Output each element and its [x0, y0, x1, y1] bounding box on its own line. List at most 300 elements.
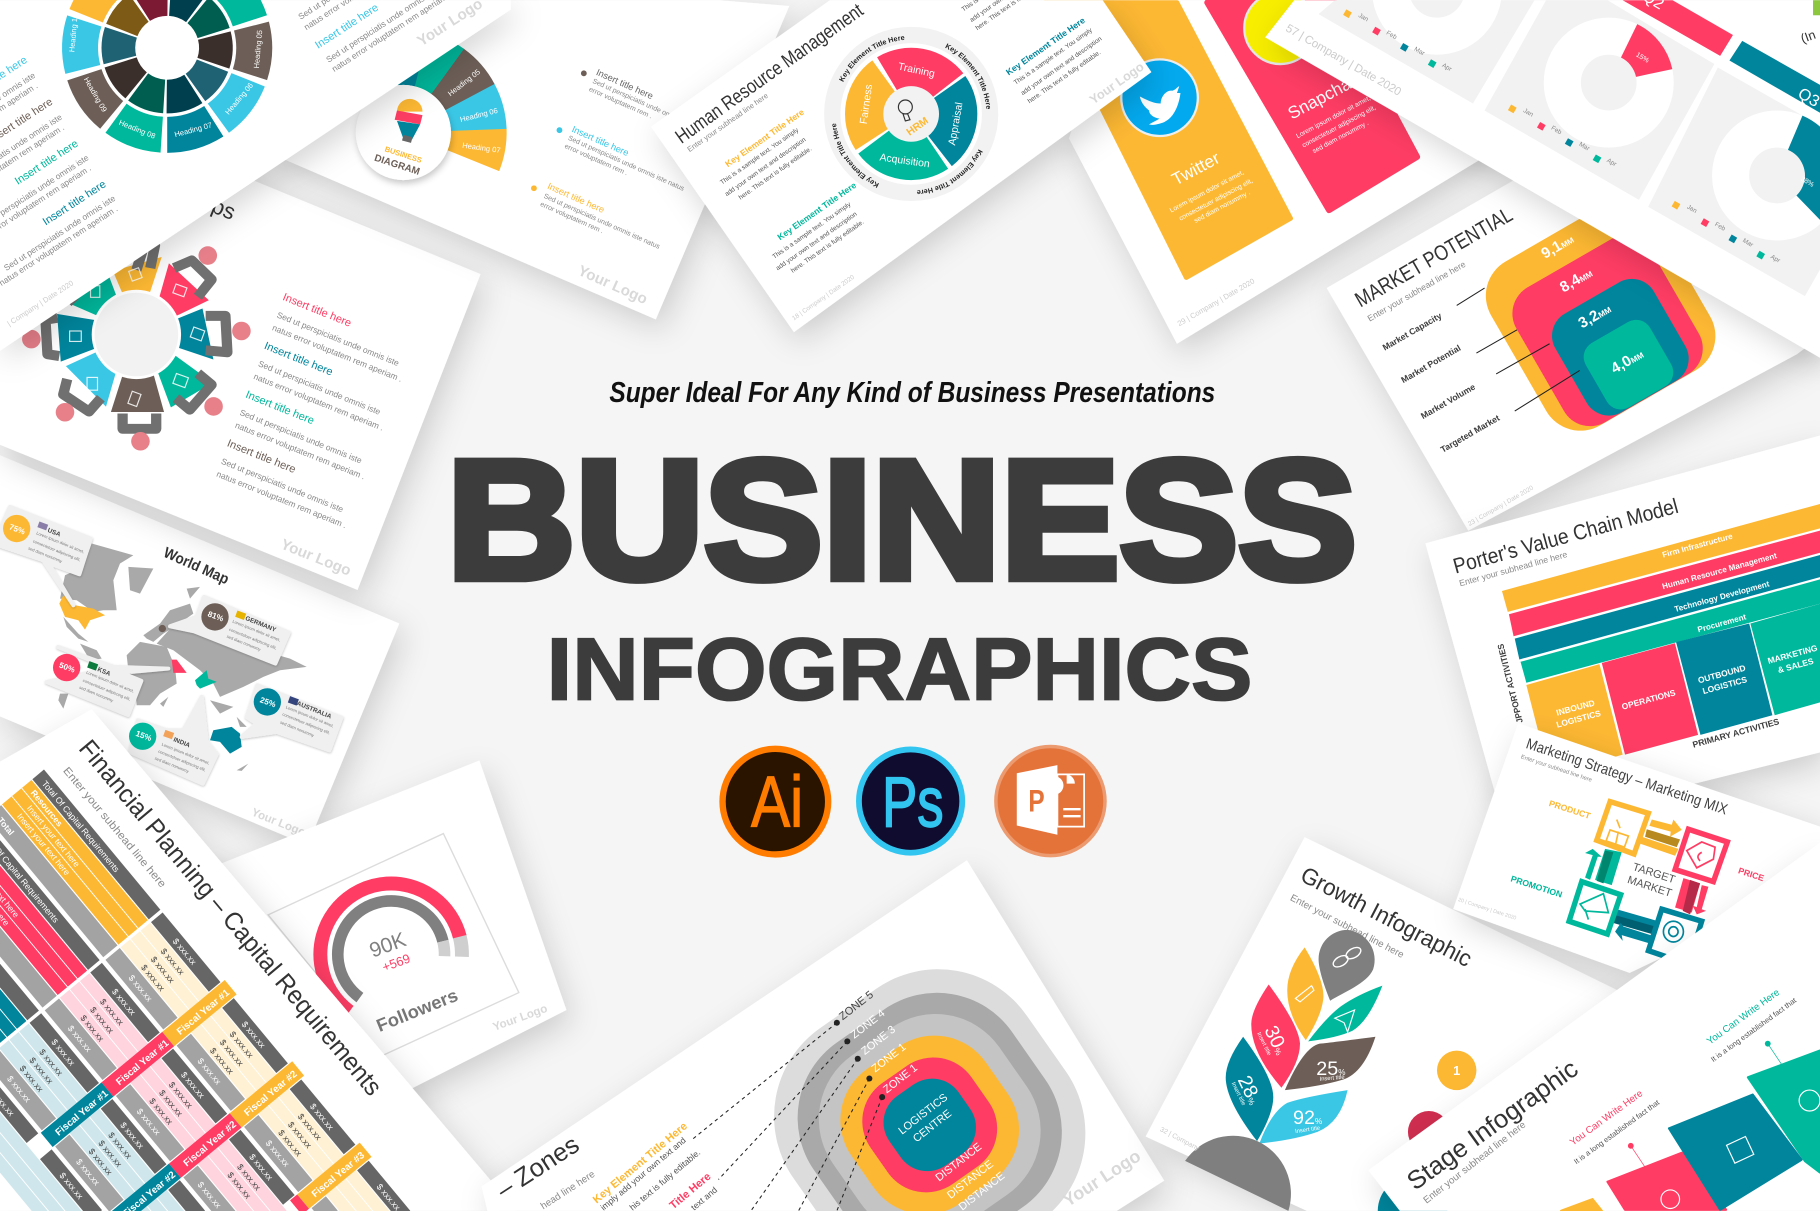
title: Porter's Value Chain Model — [1451, 494, 1681, 578]
support activity bands — [1502, 504, 1820, 683]
table: $ xxx.xx — [235, 1162, 263, 1193]
gauge value: 90K — [366, 928, 409, 962]
callout labels: GERMANY — [244, 615, 278, 634]
text list: natus error voluptatem rem aperiam . — [271, 322, 404, 384]
fiscal year labels: Fiscal Year #1 — [175, 987, 232, 1038]
cell values: $ xxx.xx — [247, 1152, 275, 1183]
panel: groups wheel slide — [0, 105, 481, 590]
donut slice 38% — [1716, 115, 1820, 236]
fan labels — [446, 67, 501, 155]
callout labels: consectetuer adipiscing elit, — [82, 678, 131, 702]
text list: Insert title here — [595, 67, 655, 101]
footer: | Company | Date 2020 — [5, 278, 75, 328]
panel: financial planning slide — [0, 709, 517, 1211]
callout labels: consectetuer adipiscing elit, — [157, 749, 207, 772]
callout labels: sed diam nonummy — [279, 720, 316, 738]
map highlight: Australia — [210, 727, 242, 754]
icon: Adobe Photoshop: Ps — [882, 764, 944, 843]
wheel labels: Appraisal — [947, 102, 965, 146]
cell values: $ xxx.xx — [127, 973, 155, 1004]
block labels: & SALES — [1777, 656, 1815, 675]
cell values: $ xxx.xx — [264, 1138, 292, 1169]
twitter card — [1045, 3, 1291, 278]
block labels — [1552, 643, 1820, 730]
legends — [1343, 9, 1782, 265]
HRM wheel — [824, 27, 998, 201]
icon: Adobe Photoshop — [859, 749, 962, 853]
callout labels: Lorem ipsum dolor sit amet, — [232, 619, 281, 642]
title: Stage Infographic — [1402, 1055, 1584, 1196]
logo text: Your Logo — [278, 536, 353, 580]
chart labels: Market Volume — [1419, 382, 1477, 421]
curved labels: Key Element Title Here Key Element Title HereKey Element Title Here — [832, 43, 990, 194]
leaf values: 30% — [1260, 1022, 1292, 1058]
centre label: MARKET — [1626, 874, 1673, 900]
title: Zones: – Zones — [492, 1131, 584, 1204]
leaf values: Insert title — [1319, 1075, 1345, 1083]
axis label: support: JPPORT ACTIVITIES — [1495, 643, 1525, 724]
text list: Sed ut perspiciatis unde omnis iste natus — [591, 78, 710, 136]
box icons — [1580, 820, 1715, 942]
text list — [215, 291, 404, 530]
band labels: Procurement — [1697, 612, 1747, 634]
row labels: Resources — [29, 788, 65, 829]
map highlight: India — [195, 670, 217, 689]
table: $ xxx.xx — [228, 1029, 256, 1060]
text list: Insert title here — [41, 178, 108, 228]
gray rows — [0, 805, 338, 1211]
chart labels: Targeted Market — [1439, 413, 1501, 455]
wheel labels — [67, 13, 264, 141]
mix diagram — [1569, 802, 1727, 964]
hub icon — [898, 100, 912, 121]
legends: Mar — [1578, 141, 1591, 153]
legends: Jan — [1686, 204, 1698, 215]
text list: natus error voluptatem rem aperiam . — [252, 371, 385, 433]
callout labels: consectetuer adipiscing elit, — [228, 627, 278, 651]
subtitle: head line here — [539, 1169, 598, 1211]
fiscal year labels: Fiscal Year #2 — [242, 1068, 300, 1119]
panel: social media slide — [1045, 0, 1532, 344]
key element text: add your own text and description — [1020, 35, 1104, 97]
callout labels: USA — [46, 527, 62, 539]
stage callout: pink: It is a long established fact that — [1572, 1097, 1662, 1166]
table: $ xxx.xx — [18, 1063, 46, 1094]
label: price: PRICE — [1737, 865, 1766, 883]
quarter label — [1798, 0, 1820, 46]
legends: Feb — [1713, 221, 1727, 233]
row labels: Insert your text here — [25, 803, 82, 869]
key element text: This is a sample text. You simply — [1013, 27, 1094, 87]
zone marker dots — [834, 1020, 885, 1100]
table: $ xxx.xx — [296, 1111, 324, 1143]
fan labels: Heading 07 — [462, 141, 501, 155]
title fragment: ps — [208, 193, 239, 225]
legends: Jan — [1522, 107, 1535, 119]
snapchat body — [1295, 95, 1377, 155]
cell values: $ xxx.xx — [196, 1180, 224, 1211]
text list: natus error voluptatem rem aperiam . — [0, 204, 119, 288]
cell values: $ xxx.xx — [58, 1171, 86, 1202]
chart values: 3,2MM — [1576, 300, 1614, 332]
row labels — [0, 779, 122, 976]
panel: world map slide — [0, 455, 399, 845]
icon: twitter — [1121, 59, 1198, 136]
snapchat body: sed diam nonummy . — [1312, 120, 1370, 155]
wheel labels: Heading 05 — [252, 30, 264, 69]
zone labels: ZONE 1 — [881, 1062, 920, 1096]
cell values: $ xxx.xx — [66, 1023, 94, 1054]
hub label: BUSINESS — [384, 144, 423, 165]
callout labels: 15% — [134, 729, 153, 743]
box: promotion — [1569, 882, 1621, 934]
callout labels: consectetuer adipiscing elit, — [32, 539, 81, 562]
donut card 2 — [1485, 0, 1714, 200]
callout cards — [0, 507, 341, 784]
block labels: LOGISTICS — [1701, 674, 1748, 696]
cell values — [0, 936, 403, 1211]
footer: 18 | Company | Date 2020 — [791, 274, 856, 322]
callout labels: sed diam nonummy — [226, 634, 262, 652]
callout labels: Lorem ipsum dolor sit amet, — [285, 705, 335, 728]
chart labels: Market Capacity — [1381, 310, 1444, 352]
hub label: DIAGRAM — [373, 153, 421, 178]
wheel labels: Heading 10 — [67, 13, 80, 53]
wheel labels — [859, 62, 965, 170]
icon: PowerPoint: P — [1028, 784, 1045, 819]
donut card 1 — [1319, 0, 1534, 103]
gauge delta: +569 — [380, 951, 412, 975]
box: product — [1597, 802, 1648, 854]
panel: porter value chain slide — [1425, 435, 1820, 801]
centre label: TARGET — [1631, 861, 1676, 886]
text list: Insert title here — [262, 340, 334, 378]
leaf values: Insert title — [1255, 1031, 1272, 1057]
table: $ xxx.xx — [159, 946, 187, 977]
key element text: Key Element Title Here — [723, 107, 806, 169]
legends: Feb — [1550, 125, 1563, 136]
label: promotion: PROMOTION — [1509, 874, 1564, 900]
icon: snapchat — [1244, 0, 1316, 64]
key element text: here. This text is fully editable. — [790, 219, 866, 275]
twitter body: consectetuer adipiscing elit, — [1178, 177, 1254, 222]
twitter body: Lorem ipsum dolor sit amet, — [1169, 169, 1245, 214]
icon: rocket — [1295, 986, 1314, 1002]
block labels: LOGISTICS — [1555, 708, 1602, 730]
stage callout: green: You Can Write Here — [1705, 987, 1782, 1047]
wheel segments — [55, 255, 216, 413]
icon: chain — [1331, 945, 1363, 969]
chart values: 9,1MM — [1538, 230, 1577, 262]
snapchat body: Lorem ipsum dolor sit amet, — [1295, 95, 1372, 140]
legends: Jan — [1357, 12, 1370, 24]
table: $ xxx.xx — [98, 997, 126, 1028]
table: $ xxx.xx — [208, 1046, 236, 1077]
block labels: OUTBOUND — [1697, 663, 1747, 685]
callout labels — [8, 522, 335, 774]
outer dots — [22, 246, 251, 451]
cell values: $ xxx.xx — [179, 1070, 207, 1101]
callout labels: Lorem ipsum dolor sit amet, — [86, 670, 135, 694]
footer: 29 | Company | Date 2020 — [1176, 276, 1256, 328]
table: $ xxx.xx — [157, 1088, 185, 1119]
panel: heading wheel slide — [0, 0, 511, 351]
fiscal year headers — [41, 980, 372, 1211]
slice label: 38% — [1799, 176, 1815, 189]
table: $ xxx.xx — [139, 963, 167, 994]
panel: marketing mix slide — [1453, 723, 1820, 973]
callout labels: sed diam nonummy — [154, 756, 190, 774]
icon: PowerPoint — [996, 747, 1105, 856]
table: $ xxx.xx — [78, 1013, 106, 1044]
twitter label: Twitter — [1168, 148, 1223, 189]
text list — [0, 54, 119, 288]
centre label: LOGISTICS — [896, 1092, 950, 1137]
table: $ xxx.xx — [149, 954, 177, 985]
table: $ xxx.xx — [27, 1055, 56, 1086]
subtitle: Enter your subhead line here — [60, 765, 168, 890]
distance labels: DISTANCE — [945, 1158, 996, 1202]
panel: market potential slide — [1327, 116, 1820, 531]
centre label: CENTRE — [911, 1108, 954, 1145]
band labels — [1661, 532, 1778, 634]
inner frame — [268, 834, 519, 1055]
row labels: Insert your text here — [15, 811, 72, 877]
fiscal year labels: Fiscal Year #3 — [310, 1150, 367, 1200]
subtitle: Enter your subhead line here — [685, 91, 770, 154]
callout labels: consectetuer adipiscing elit, — [282, 711, 331, 735]
leaf chart — [1185, 930, 1382, 1211]
block labels: MARKETING — [1766, 643, 1819, 666]
wheel icons — [70, 268, 205, 406]
cell values: $ xxx.xx — [171, 936, 199, 967]
nested squares chart — [1471, 187, 1730, 445]
logo text: Your Logo — [491, 1002, 549, 1034]
text list: Insert title here — [546, 181, 606, 215]
row separators — [0, 788, 376, 1211]
key element text: imply add your own text and — [598, 1135, 688, 1211]
text list: right: Insert title here — [313, 2, 381, 51]
text list: Sed ut perspiciatis unde omnis iste — [276, 310, 401, 368]
wheel labels: Heading 09 — [82, 76, 109, 113]
callout labels: 25% — [259, 695, 277, 709]
table: $ xxx.xx — [218, 1037, 246, 1068]
step marker 1 — [1437, 1051, 1476, 1090]
wheel inner ring — [99, 0, 236, 116]
zone leader lines — [693, 1023, 882, 1211]
chart values — [1538, 230, 1647, 377]
table: $ xxx.xx — [286, 1120, 314, 1151]
callout labels: Lorem ipsum dolor sit amet, — [161, 742, 210, 766]
wheel chairs — [45, 245, 227, 429]
legends: Feb — [1385, 30, 1398, 41]
table: $ xxx.xx — [147, 1096, 175, 1127]
zone rings — [732, 927, 1128, 1211]
step marker 3 — [1378, 1176, 1447, 1211]
quarter bar Q2 — [1623, 0, 1733, 56]
donut slice 15% — [1547, 21, 1671, 145]
block labels: INBOUND — [1555, 698, 1596, 718]
step marker 1: 1 — [1453, 1063, 1460, 1078]
wheel hub — [95, 293, 178, 376]
panel: donut charts slide — [1265, 0, 1820, 358]
icon: Adobe Illustrator — [723, 749, 828, 854]
donut card 3 — [1648, 68, 1820, 296]
band labels: Human Resource Management — [1661, 551, 1778, 591]
cell values: $ xxx.xx — [118, 1120, 146, 1151]
primary activity blocks — [1526, 604, 1820, 776]
band labels: Firm Infrastructure — [1661, 532, 1734, 560]
callout labels: 75% — [8, 522, 26, 536]
chart values: 4,0MM — [1608, 345, 1647, 377]
snapchat label: Snapchat — [1284, 71, 1359, 123]
snapchat card — [1207, 0, 1417, 210]
callout labels: INDIA — [172, 736, 191, 749]
subtitle: Enter your subhead line here — [1520, 754, 1592, 784]
text list: Insert title here — [13, 138, 81, 187]
snapchat body: consectetuer adipiscing elit, — [1301, 104, 1377, 149]
fiscal year labels: Fiscal Year #1 — [114, 1038, 172, 1088]
diagram hub — [356, 85, 451, 180]
text list: error voluptatem rem . — [563, 143, 629, 177]
zone labels: ZONE 3 — [859, 1024, 898, 1058]
logo text: Your Logo — [1087, 59, 1147, 107]
wheel labels: Heading 07 — [173, 120, 213, 139]
fiscal year labels: Fiscal Year #1 — [54, 1088, 111, 1138]
table: $ xxx.xx — [87, 1146, 115, 1177]
cell values: $ xxx.xx — [195, 1056, 224, 1087]
key element text: add your own text and description — [724, 136, 808, 198]
chart values: 8,4MM — [1557, 264, 1596, 296]
text list: Sed ut perspiciatis unde omnis iste — [2, 193, 117, 273]
callout labels: AUSTRALIA — [296, 700, 333, 721]
fan labels: Heading 05 — [446, 67, 482, 98]
chart labels — [1381, 310, 1501, 455]
distance labels — [933, 1141, 1007, 1211]
text list: Sed ut perspiciatis unde omnis iste — [238, 407, 364, 466]
table: $ xxx.xx — [106, 1130, 134, 1161]
wheel hub — [883, 86, 939, 142]
text list: Insert title here — [244, 389, 316, 427]
leaf values: Insert title — [1295, 1126, 1321, 1135]
text list — [531, 67, 710, 251]
key element text: Key Element Title Here — [591, 1120, 690, 1206]
label: Followers: Followers — [374, 985, 461, 1036]
panel: followers slide — [174, 760, 566, 1097]
legends: Mar — [1413, 46, 1427, 58]
callout labels: sed diam nonummy — [79, 685, 115, 703]
distance labels: DISTANCE — [933, 1141, 984, 1184]
logo text: Your Logo — [575, 262, 650, 308]
cell values: $ xxx.xx — [135, 1106, 163, 1137]
icon: Adobe Illustrator: Ai — [751, 763, 803, 843]
table: $ xxx.xx — [167, 1080, 195, 1111]
callout labels: Lorem ipsum dolor sit amet, — [36, 530, 85, 554]
legends: Apr — [1441, 62, 1453, 73]
block labels: OPERATIONS — [1621, 687, 1677, 712]
text list: Sed ut perspiciatis unde omnis iste — [220, 456, 345, 514]
text list: Sed ut perspiciatis unde omnis iste natus — [567, 135, 686, 193]
zone labels: ZONE 4 — [849, 1007, 887, 1041]
step marker 2 — [1408, 1111, 1450, 1153]
world map — [0, 507, 341, 784]
panel: growth infographic slide — [1146, 837, 1648, 1211]
percent badges — [3, 515, 281, 750]
stage icons — [1661, 1090, 1820, 1208]
footer: 57 | Company | Date 2020 — [1283, 22, 1403, 99]
leaf values: Insert title — [1230, 1081, 1246, 1107]
key element text: Key Element Title Here — [775, 180, 858, 242]
subtitle: Enter your subhead line here — [1422, 1119, 1529, 1206]
stage callout: green: It is a long established fact that — [1709, 995, 1799, 1064]
logo text: Your Logo — [250, 806, 307, 839]
zone labels: ZONE 1 — [870, 1041, 908, 1075]
text list: natus error voluptatem rem aperiam . — [234, 420, 367, 481]
curved labels: Key Element Title Here — [839, 36, 904, 82]
title: World Map: World Map — [161, 544, 231, 588]
panel: business diagram slide — [279, 0, 789, 319]
text list: Sed ut perspiciatis unde omnis iste — [257, 358, 382, 417]
cell values: $ xxx.xx — [110, 987, 138, 1018]
fan segments — [298, 27, 509, 238]
box: price — [1675, 829, 1727, 882]
text list: natus error voluptatem rem aperiam . — [215, 469, 348, 530]
text list: Insert title here — [225, 438, 297, 476]
title: Growth Infographic — [1297, 861, 1476, 972]
zone labels: ZONE 5 — [837, 989, 876, 1023]
stage blocks — [1561, 1051, 1820, 1211]
cell values: $ xxx.xx — [308, 1101, 336, 1132]
row labels: Total Of Capital Requirements — [40, 779, 122, 875]
flags — [37, 521, 299, 739]
wheel labels: Heading 06 — [223, 81, 255, 116]
wheel labels: Acquisition — [879, 152, 930, 170]
table — [0, 767, 414, 1211]
title: BUSINESS: BUSINESS — [447, 425, 1357, 614]
map highlight: USA — [59, 595, 105, 630]
coloured rows — [0, 780, 390, 1211]
subtitle: Enter your subhead line here — [1458, 549, 1568, 588]
quarter label: (In — [1798, 27, 1818, 46]
title: Financial Planning – Capital Requirements — [73, 735, 387, 1101]
panel: human resource management slide — [654, 0, 1159, 345]
legends: Apr — [1605, 157, 1618, 169]
text list: Sed ut perspiciatis unde omnis iste natus — [542, 193, 661, 251]
wheel outer ring — [44, 0, 290, 170]
callout labels: 81% — [206, 609, 225, 624]
subtitle: Enter your subhead line here — [1366, 259, 1467, 323]
leaf values: 28% — [1233, 1072, 1265, 1108]
icon: light bulb — [395, 99, 422, 143]
leader lines — [1457, 288, 1580, 411]
callout labels: KSA — [96, 666, 112, 678]
key element text: Title Here — [667, 1171, 713, 1211]
panel: stage infographic slide — [1368, 843, 1820, 1211]
cell values: $ xxx.xx — [49, 1037, 77, 1068]
table: $ xxx.xx — [276, 1128, 304, 1159]
map highlight: Germany — [159, 625, 166, 632]
zone labels — [837, 989, 920, 1096]
chart labels: Market Potential — [1399, 343, 1462, 385]
icon: paper plane — [1335, 1010, 1355, 1032]
box: place — [1648, 909, 1702, 964]
table: $ xxx.xx — [88, 1005, 116, 1036]
fiscal year labels: Fiscal Year #2 — [182, 1119, 239, 1169]
panel: logistics zones slide — [482, 860, 1164, 1211]
title: INFOGRAPHICS: INFOGRAPHICS — [547, 620, 1252, 719]
wheel segments — [846, 49, 976, 179]
table: $ xxx.xx — [96, 1138, 125, 1169]
